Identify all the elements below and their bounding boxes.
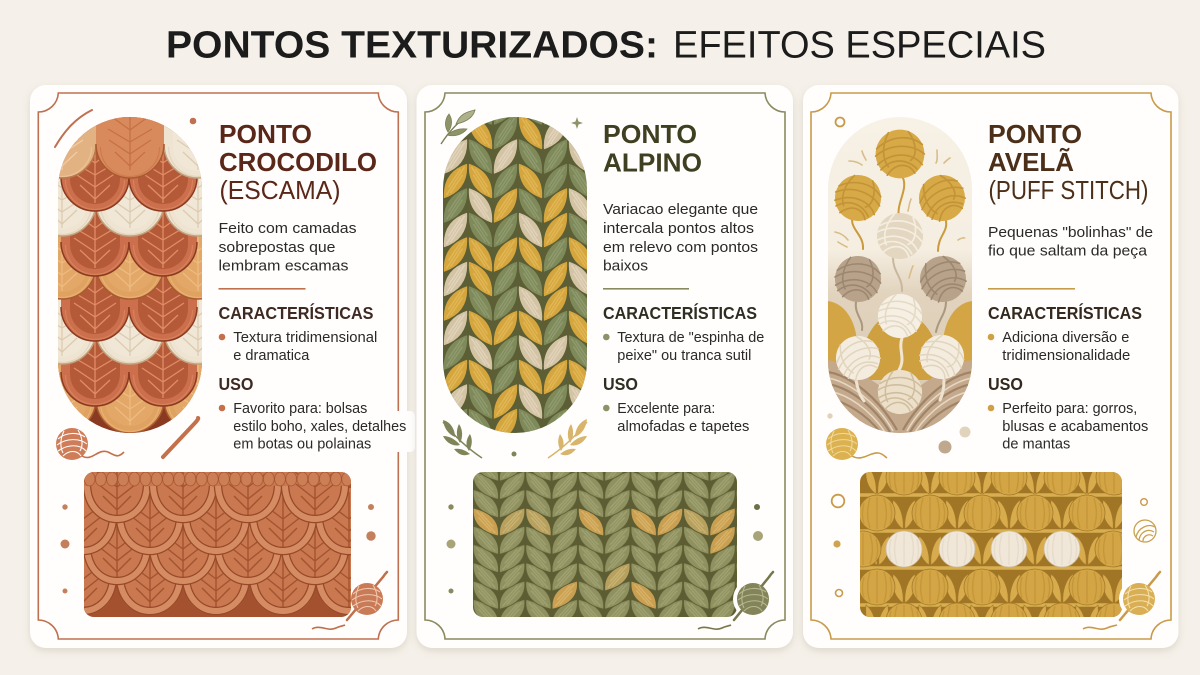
gold hills: [828, 301, 972, 388]
icon: yarn ball with hook: [312, 572, 387, 629]
uso: [988, 374, 1149, 452]
características: [603, 302, 764, 364]
description: intercala pontos altos: [603, 220, 754, 237]
heading: CROCODILO: [219, 149, 377, 177]
panel: ponto crocodilo: [28, 85, 415, 648]
dot: [512, 452, 516, 456]
description: sobrepostas que: [218, 239, 336, 256]
heading: (PUFF STITCH): [988, 177, 1148, 205]
heading: [603, 121, 702, 178]
características: Textura tridimensional: [233, 329, 377, 346]
icon: leaf sprig bottom right: [548, 419, 587, 458]
description: fio que saltam da peça: [988, 242, 1148, 260]
swoosh marks: [835, 150, 965, 278]
heading: PONTO: [219, 121, 312, 149]
description: [988, 224, 1153, 260]
uso: blusas e acabamentos: [1002, 418, 1149, 435]
características: e dramatica: [233, 347, 310, 364]
stitch swatch: [860, 472, 1122, 617]
description: lembram escamas: [218, 258, 349, 274]
description: Feito com camadas: [218, 220, 357, 237]
card background: [803, 85, 1178, 648]
card border: [425, 93, 785, 639]
icon: yarn ball with hook: [698, 572, 773, 629]
herringbone pill: [443, 114, 593, 444]
swatch dots: [446, 504, 763, 594]
description: Variacao elegante que: [603, 201, 758, 218]
características: Textura de "espinha de: [617, 329, 764, 346]
uso: USO: [218, 374, 254, 394]
características: peixe" ou tranca sutil: [617, 347, 751, 364]
divider: [988, 288, 1075, 290]
balls: [876, 130, 924, 178]
uso: [218, 374, 407, 452]
icon: crochet hook: [163, 418, 198, 457]
card background: [416, 85, 793, 648]
características: tridimensionalidade: [1002, 347, 1130, 364]
white tab behind text: [392, 411, 415, 452]
card background: [30, 85, 407, 648]
swatch dots: [60, 504, 376, 594]
heading: [219, 121, 377, 205]
taupe yarn base: [828, 360, 972, 433]
description: [218, 220, 357, 274]
title: EFEITOS ESPECIAIS: [673, 24, 1046, 66]
yarn balls pill: [828, 117, 972, 433]
icon: yarn ball: [56, 428, 124, 460]
title: PONTOS TEXTURIZADOS:: [166, 24, 658, 66]
scale pattern pill: [58, 117, 202, 433]
description: em relevo com pontos: [603, 239, 758, 256]
dot: [190, 118, 196, 124]
card border: [38, 93, 398, 639]
uso: de mantas: [1002, 436, 1071, 452]
divider: [603, 288, 689, 290]
heading: ALPINO: [603, 150, 702, 178]
panel: ponto avelã: [795, 85, 1178, 648]
icon: yarn ball with hook: [1083, 572, 1160, 629]
ring: [836, 118, 844, 126]
características: [218, 302, 377, 364]
icon: sparkle: [571, 117, 583, 129]
card border: [811, 93, 1171, 639]
heading: (ESCAMA): [220, 177, 340, 205]
icon: leaf sprig bottom left: [443, 420, 482, 458]
uso: Favorito para: bolsas: [233, 400, 368, 417]
uso: [603, 374, 750, 435]
heading: AVELÃ: [988, 147, 1074, 177]
description: baixos: [603, 258, 648, 274]
uso: Perfeito para: gorros,: [1002, 400, 1137, 417]
icon: yarn ball: [826, 428, 887, 460]
description: [603, 201, 758, 274]
title: [166, 24, 1046, 66]
decorative arc: [55, 110, 92, 147]
uso: em botas ou polainas: [233, 436, 372, 452]
swatch dots and rings: [832, 495, 1147, 596]
divider: [218, 288, 306, 290]
description: Pequenas "bolinhas" de: [988, 224, 1153, 241]
dots: [827, 413, 970, 454]
heading: [988, 121, 1148, 205]
características: CARACTERÍSTICAS: [988, 302, 1142, 323]
características: Adiciona diversão e: [1002, 329, 1129, 346]
características: CARACTERÍSTICAS: [603, 302, 757, 323]
icon: striped yarn ball: [1134, 520, 1156, 542]
características: CARACTERÍSTICAS: [218, 302, 374, 323]
uso: USO: [603, 374, 638, 394]
heading: PONTO: [988, 121, 1082, 149]
características: [988, 302, 1142, 364]
yarn threads: [852, 178, 946, 401]
uso: USO: [988, 374, 1023, 394]
panel: ponto alpino: [416, 85, 793, 648]
uso: estilo boho, xales, detalhes: [233, 418, 407, 435]
stitch swatch: [473, 472, 737, 617]
uso: almofadas e tapetes: [617, 418, 750, 435]
stitch swatch: [84, 472, 351, 617]
uso: Excelente para:: [617, 400, 715, 417]
heading: PONTO: [603, 121, 697, 149]
icon: leaf sprig top left: [441, 110, 475, 144]
